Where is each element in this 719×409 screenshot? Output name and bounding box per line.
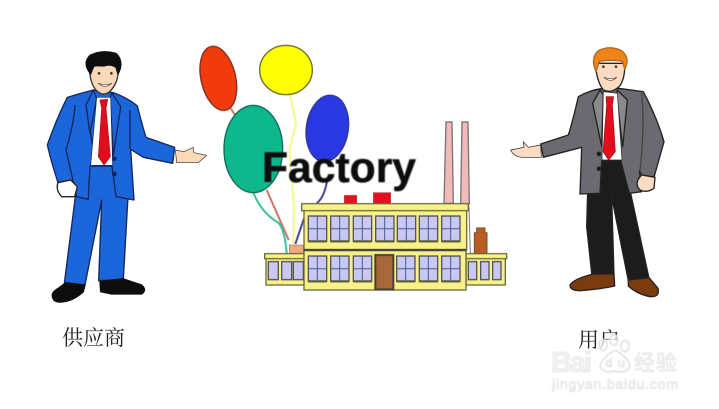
watermark: Baidu jingyan: 经验 xyxy=(634,352,677,375)
chimneys xyxy=(444,122,469,204)
main building xyxy=(304,210,467,250)
watermark: Baidu jingyan: jingyan.baidu.com xyxy=(551,376,678,392)
wings xyxy=(265,204,507,290)
balloon: yellow xyxy=(260,45,312,95)
door xyxy=(375,255,393,289)
label: user: 用户 xyxy=(578,328,620,352)
windows xyxy=(268,216,501,281)
illustration: user man in grey jacket xyxy=(511,48,664,297)
balloon: red xyxy=(194,43,243,114)
watermark: Baidu jingyan: Bai xyxy=(551,347,592,379)
watermark: Baidu jingyan: du xyxy=(605,356,625,370)
balloon: green xyxy=(224,105,283,193)
title: Factory: Factory xyxy=(262,144,416,192)
illustration: supplier man in blue suit xyxy=(47,52,207,302)
balloon strings xyxy=(231,95,327,253)
watermark: Baidu jingyan xyxy=(551,334,678,392)
balloon: blue xyxy=(302,92,353,164)
icon: paw xyxy=(599,334,630,372)
roof vents xyxy=(344,195,357,204)
label: supplier: 供应商 xyxy=(62,326,125,350)
tank xyxy=(474,228,487,253)
balloons, strings and factory building xyxy=(194,43,507,290)
